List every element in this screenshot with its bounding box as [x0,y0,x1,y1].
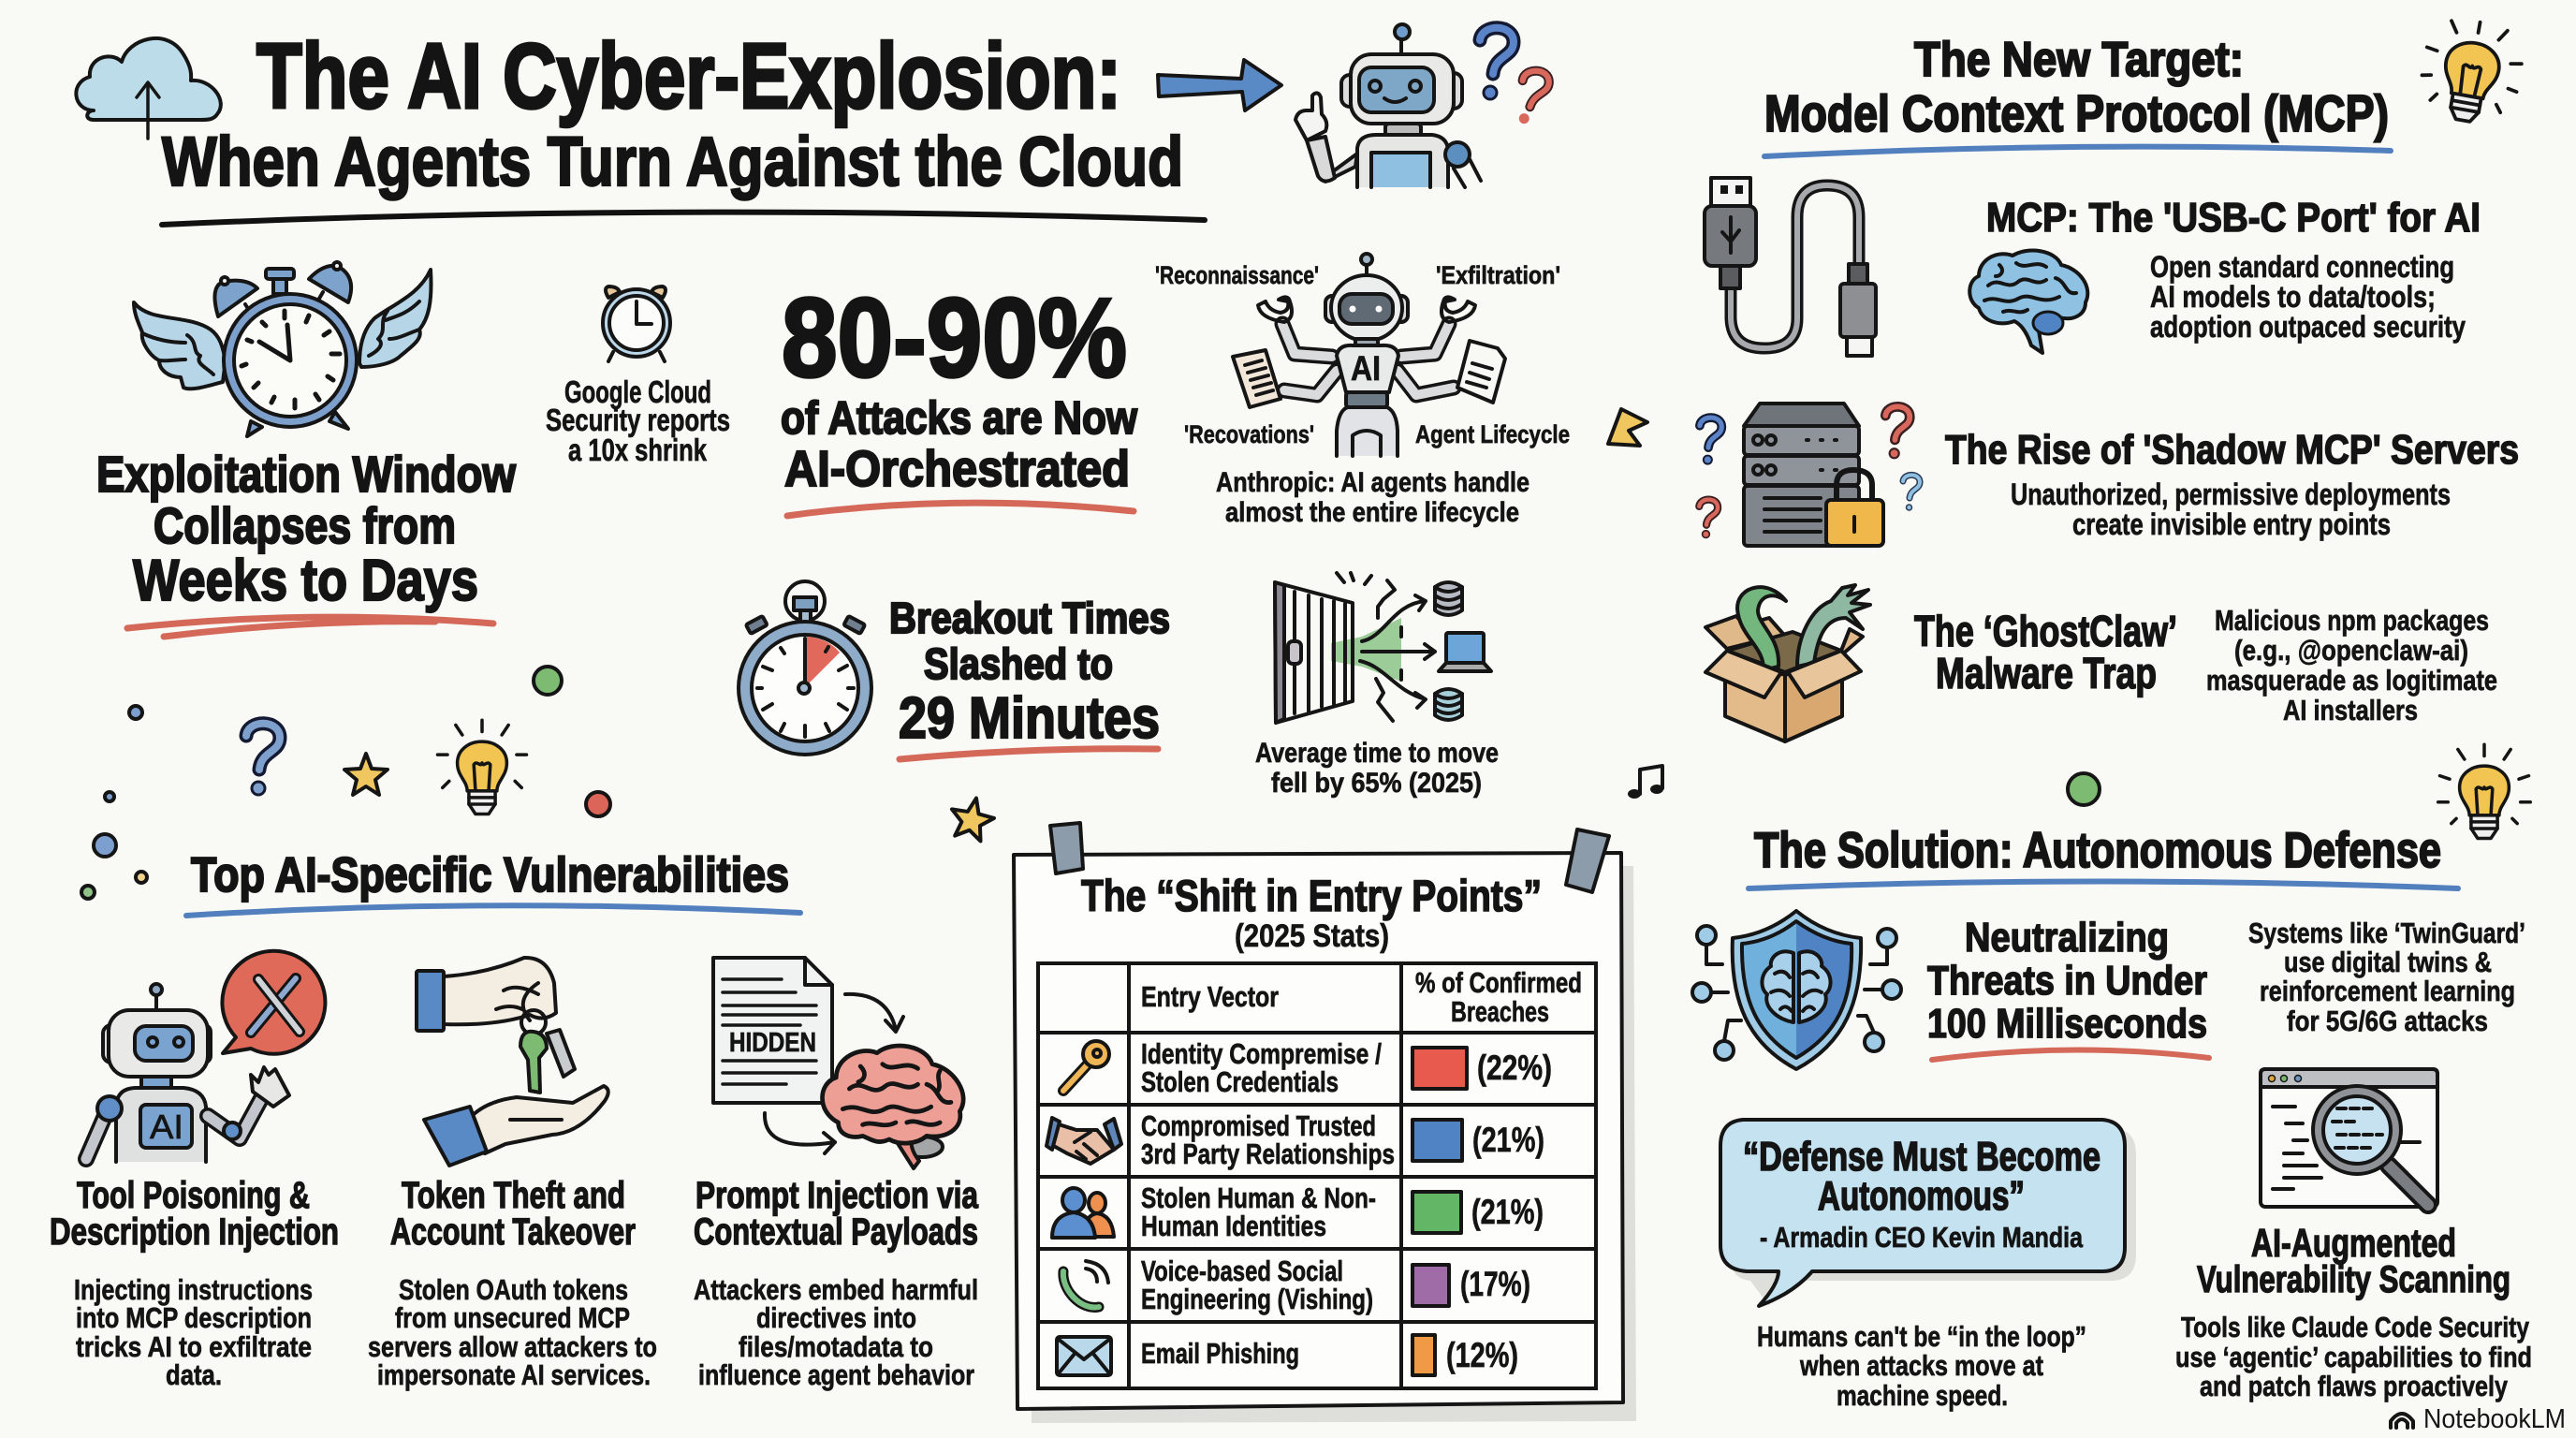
text: ai-augmented scanning [2175,1221,2532,1402]
icon: handshake [1046,1118,1121,1164]
icon: box with tentacle and claw [1705,585,1870,741]
icon: question marks around server [1699,406,1920,537]
section heading: The New Target: [1914,33,2244,87]
text: prompt injection: files/motadata to [739,1330,933,1363]
labels around robot: 'Reconnaissance' [1155,261,1319,289]
heading: breakout times: 29 Minutes [899,686,1160,751]
icon: cloud upload [76,38,221,139]
caption: anthropic: Anthropic: AI agents handle [1216,467,1530,498]
text: humans in the loop: Humans can't be “in the loop” [1757,1320,2086,1353]
text: prompt injection: Contextual Payloads [694,1211,978,1253]
heading: exploitation window collapses [96,447,517,613]
icon: door with flowing arrows [1275,573,1491,723]
table header: % of Confirmed [1415,966,1582,999]
panel: multi-armed AI agent [1155,254,1570,528]
text: MCP description [2150,250,2466,344]
row: identities: (21%) [1471,1193,1544,1231]
caption: average time: fell by 65% (2025) [1271,768,1482,799]
caption: average time: Average time to move [1255,738,1499,769]
text: ghostclaw title: Malware Trap [1936,649,2157,697]
text: tool poisoning [50,1175,339,1391]
text: google cloud note [546,374,730,467]
icon: light bulb [2416,14,2527,128]
text: prompt injection: directives into [756,1301,916,1334]
row: vishing: Engineering (Vishing) [1141,1283,1373,1315]
row: third party: 3rd Party Relationships [1141,1137,1395,1170]
icon: envelope [1057,1337,1111,1375]
logo: NotebookLM: NotebookLM [2423,1404,2566,1434]
icon: light bulb [2438,744,2530,839]
row: third party: (21%) [1472,1121,1544,1159]
heading: breakout times: Slashed to [924,639,1113,688]
labels around robot: 'Recovations' [1184,420,1314,448]
text: shadow MCP: create invisible entry points [2072,507,2391,541]
blue underline [1749,882,2458,888]
heading: neutralizing threats: 100 Milliseconds [1927,1001,2207,1047]
icon: yellow pointer arrow [1608,409,1647,446]
text: prompt injection [694,1175,979,1391]
caption: anthropic [1216,467,1530,528]
text: twinguard description: for 5G/6G attacks [2287,1005,2488,1037]
icon: key [1063,1041,1109,1091]
text: ai-augmented scanning: and patch flaws proactively [2200,1370,2509,1402]
callout: quote speech bubble: “Defense Must Become [1743,1134,2100,1180]
text: tool poisoning: tricks AI to exfiltrate [76,1330,312,1363]
callout: quote speech bubble: Autonomous” [1818,1173,2025,1219]
big stat: 80-90% [782,275,1127,401]
table title: (2025 Stats) [1235,918,1389,954]
text: humans in the loop: when attacks move at [1799,1349,2043,1382]
text: tool poisoning: Tool Poisoning & [77,1175,310,1216]
table header: Breaches [1451,995,1549,1028]
text: MCP description: adoption outpaced security [2150,310,2466,344]
section heading [1764,33,2389,142]
heading: neutralizing threats: Neutralizing [1965,915,2169,961]
icon: robot with tools bubble: AI [150,1108,183,1146]
row: identity compromise: Identity Compremise / [1141,1037,1382,1070]
icon: small alarm clock [603,286,670,361]
icon: USB cable [1705,178,1876,356]
icon: people [1052,1188,1114,1238]
icon: robot with four arms: AI [1351,349,1381,388]
stat caption: of Attacks are Now [781,393,1138,444]
section heading: Top AI-Specific Vulnerabilities [191,848,789,902]
icon: stopwatch [739,581,871,755]
row: vishing: (17%) [1460,1265,1530,1303]
icon: robot with tools bubble [86,951,325,1162]
panel: top AI-specific vulnerabilities [50,848,979,1391]
text: token theft: from unsecured MCP [395,1301,630,1334]
labels around robot: 'Exfiltration' [1436,261,1560,289]
heading: breakout times [889,594,1170,751]
icon: blue brain [1969,251,2087,353]
row: vishing [1063,1255,1530,1315]
row: identity compromise: (22%) [1477,1049,1552,1087]
callout: quote speech bubble: - Armadin CEO Kevin Mandia [1760,1221,2084,1254]
icon: shield with brain and nodes [1692,911,1901,1069]
text: ghostclaw description: masquerade as logitimate [2206,664,2497,697]
text: prompt injection: Prompt Injection via [695,1175,979,1216]
text: ghostclaw title [1914,607,2177,697]
icon: phone [1063,1261,1108,1307]
labels around robot: Agent Lifecycle [1415,420,1570,448]
text: google cloud note: Google Cloud [564,374,711,409]
text: ghostclaw description: Malicious npm packages [2215,604,2489,637]
red underline [127,617,493,637]
callout: quote speech bubble [1720,1120,2136,1306]
table grid [1038,963,1596,1388]
text: ai-augmented scanning: AI-Augmented [2251,1221,2456,1265]
caption: average time [1255,738,1499,799]
panel: lateral movement door [1255,573,1499,799]
stat caption [781,393,1138,497]
row: vishing: Voice-based Social [1141,1255,1343,1287]
icon: blue arrow [1158,60,1281,110]
heading: exploitation window collapses: Weeks to Days [133,549,478,613]
labels around robot [1155,261,1570,448]
text: prompt injection: Attackers embed harmful [694,1273,978,1306]
text: tool poisoning: into MCP description [76,1301,312,1334]
text: google cloud note: Security reports [546,403,730,437]
text: tool poisoning: data. [166,1358,222,1391]
heading: neutralizing threats [1927,915,2207,1047]
text: twinguard description: reinforcement learning [2260,975,2515,1007]
panel: the solution autonomous defense [1692,744,2532,1412]
icon: robot with question marks [1295,24,1549,187]
text: USB-C port heading: MCP: The 'USB-C Port' for AI [1986,195,2481,241]
text: token theft: Token Theft and [402,1175,625,1216]
text: ghostclaw description [2206,604,2497,726]
table title [1081,871,1542,954]
panel: the new target MCP [1699,14,2527,741]
heading: exploitation window collapses: Exploitation Window [96,447,517,503]
panel: 80-90 percent stat [781,275,1138,516]
question mark blue [1480,28,1514,99]
icon: browser with magnifier [2261,1069,2437,1207]
table header [1141,966,1582,1028]
red underline [900,749,1158,759]
tape right [1566,829,1609,892]
row: identity compromise [1063,1037,1552,1098]
hidden label: HIDDEN [729,1028,816,1058]
text: token theft: Stolen OAuth tokens [399,1273,628,1306]
text: humans in the loop [1757,1320,2086,1412]
section heading: Model Context Protocol (MCP) [1764,84,2389,142]
text: google cloud note: a 10x shrink [568,433,708,467]
blue underline [186,905,800,916]
text: shadow MCP [1945,427,2519,541]
row: identities: Stolen Human & Non- [1141,1181,1376,1214]
row: phishing [1057,1335,1518,1375]
text: twinguard description: use digital twins & [2284,946,2492,978]
title underline [162,213,1205,225]
row: third party [1046,1109,1544,1170]
text: token theft [368,1175,657,1391]
subtitle line 2: When Agents Turn Against the Cloud [162,123,1183,200]
tape left [1050,823,1083,873]
icon: hands passing keys [417,958,608,1166]
icon: robot with four arms [1233,254,1505,456]
icon: hidden document into brain [713,958,963,1168]
text: humans in the loop: machine speed. [1837,1379,2008,1412]
text: shadow MCP: Unauthorized, permissive deployments [2011,477,2451,511]
heading: exploitation window collapses: Collapses from [154,498,456,554]
text: tool poisoning: Injecting instructions [74,1273,313,1306]
row: identities: Human Identities [1141,1210,1326,1242]
row: identities [1052,1181,1544,1242]
table header: Entry Vector [1141,980,1279,1013]
red underline [1932,1049,2209,1060]
text: ghostclaw description: AI installers [2283,694,2418,726]
header: title block [76,24,1281,225]
heading: neutralizing threats: Threats in Under [1927,958,2207,1004]
row: third party: Compromised Trusted [1141,1109,1376,1142]
blue underline [1764,147,2391,156]
text: token theft: Account Takeover [390,1211,636,1253]
text: twinguard description [2248,917,2525,1037]
panel: exploitation window [96,262,730,637]
question mark red [1519,71,1549,124]
panel: breakout times [739,581,1170,759]
text: token theft: servers allow attackers to [368,1330,657,1363]
text: MCP description: Open standard connecting [2150,250,2454,284]
panel: shift in entry points table [1014,823,1636,1423]
decorative doodles [81,667,2100,899]
row: phishing: Email Phishing [1141,1337,1299,1370]
text: prompt injection: influence agent behavior [698,1358,974,1391]
row: phishing: (12%) [1446,1336,1518,1374]
text: tool poisoning: Description Injection [50,1211,339,1253]
text: ghostclaw title: The ‘GhostClaw’ [1914,607,2177,655]
caption: anthropic: almost the entire lifecycle [1225,497,1519,528]
stat caption: AI-Orchestrated [784,441,1130,497]
text: MCP description: AI models to data/tools; [2150,280,2436,314]
title line 1: The AI Cyber-Explosion: [256,24,1121,127]
text: token theft: impersonate AI services. [377,1358,651,1391]
icon: winged alarm clock [134,262,431,436]
section heading: The Solution: Autonomous Defense [1754,823,2441,878]
table title: The “Shift in Entry Points” [1081,871,1542,920]
red underline [787,503,1134,516]
row: identity compromise: Stolen Credentials [1141,1065,1339,1098]
text: ghostclaw description: (e.g., @openclaw-ai) [2234,634,2468,667]
icon: server with padlock [1744,404,1883,546]
heading: breakout times: Breakout Times [889,594,1170,642]
